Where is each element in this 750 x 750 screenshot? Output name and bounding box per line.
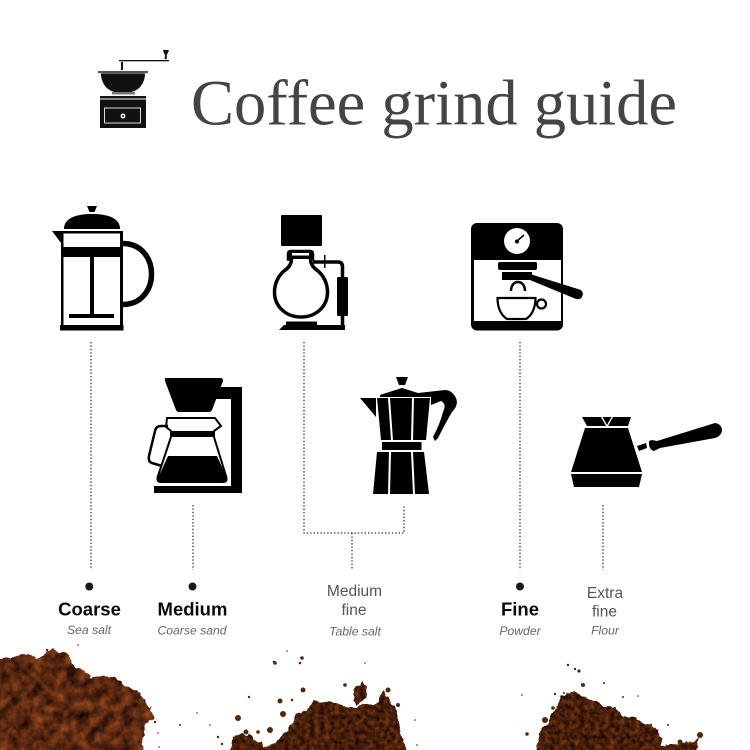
- coarse coffee pile: [0, 650, 155, 750]
- label: coarse: Coarse: [58, 598, 121, 620]
- label: coarse: [58, 598, 121, 637]
- label: extra fine: Flour: [591, 624, 620, 638]
- connector: medium: [192, 505, 194, 570]
- connector: fine: [519, 342, 521, 570]
- label: medium fine: [327, 583, 382, 638]
- fine coffee pile: [534, 691, 698, 750]
- label: extra fine: fine: [592, 604, 617, 620]
- icon: drip coffee maker: [149, 378, 242, 493]
- label: medium: Medium: [158, 598, 227, 620]
- icon: french press: [52, 206, 152, 330]
- label: extra fine: Extra: [587, 585, 623, 602]
- label: fine: Powder: [499, 624, 542, 638]
- label: fine: [499, 598, 542, 638]
- label: medium: Coarse sand: [157, 624, 228, 638]
- label: coarse: Sea salt: [67, 623, 112, 637]
- icon: espresso machine: [471, 223, 583, 330]
- coffee specks: [46, 644, 703, 750]
- marker: coarse: [85, 582, 93, 590]
- medium coffee pile: [226, 692, 408, 750]
- marker: fine: [516, 582, 524, 590]
- connector: coarse: [90, 342, 92, 570]
- label: extra fine: [587, 585, 623, 638]
- label: medium fine: Table salt: [329, 624, 381, 638]
- connector: extra fine: [602, 505, 604, 570]
- connector: medium fine: [304, 342, 404, 570]
- title: Coffee grind guide: [191, 68, 677, 140]
- icon: moka pot: [360, 377, 457, 494]
- icon: siphon brewer: [274, 215, 348, 330]
- marker: medium: [188, 582, 196, 590]
- icon: turkish cezve: [571, 417, 722, 487]
- label: medium: [157, 598, 228, 638]
- label: fine: Fine: [501, 598, 539, 620]
- label: medium fine: Medium: [327, 583, 382, 600]
- coffee clump: [352, 682, 368, 704]
- icon: coffee grinder: [98, 50, 169, 128]
- label: medium fine: fine: [342, 602, 366, 619]
